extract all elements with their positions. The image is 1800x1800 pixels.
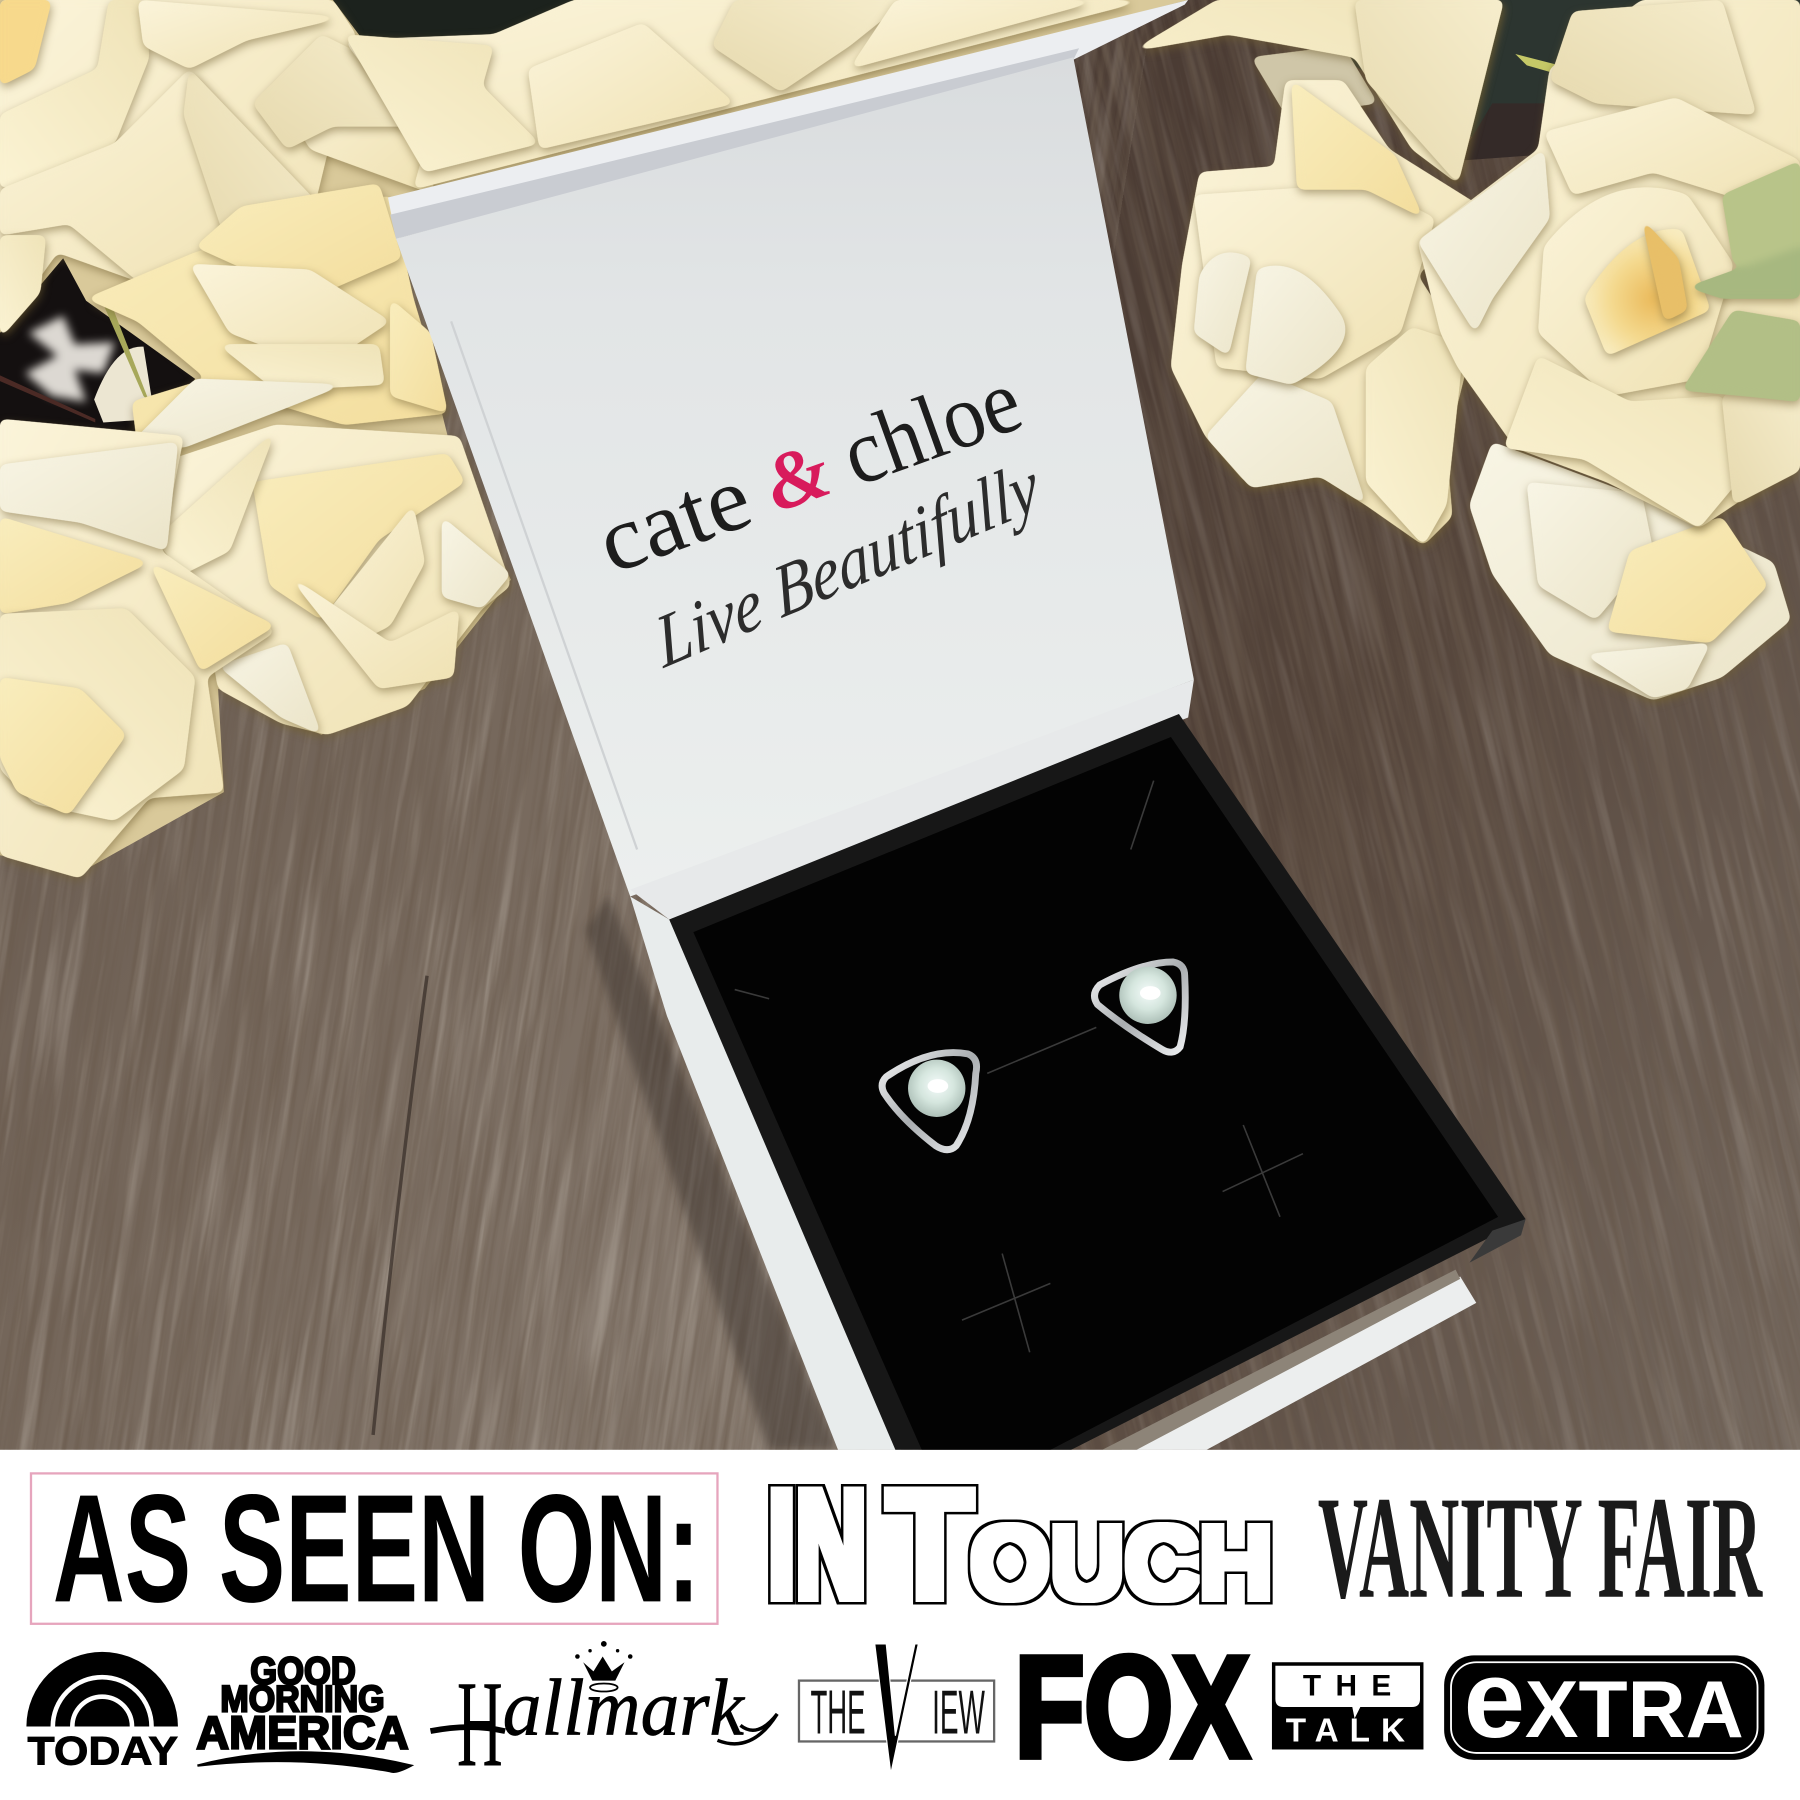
- logo strip background: [0, 1450, 1800, 1800]
- box shadow on table: [585, 895, 838, 1450]
- logo: InTouch: OUCH: [970, 1504, 1273, 1620]
- logo: The View: IEW: [932, 1678, 985, 1747]
- inner crease line: [451, 321, 637, 849]
- logo: The View: THE: [810, 1678, 866, 1747]
- flower underlayer shadow: [0, 0, 1188, 872]
- rose: upper middle left: [86, 34, 448, 448]
- logo: Extra: eXTRA: [1464, 1638, 1744, 1761]
- logo: InTouch: IN: [768, 1458, 867, 1632]
- rose: top right petal: [1131, 0, 1504, 184]
- logo: Today: [26, 1652, 178, 1773]
- logo: Good Morning America: AMERICA: [196, 1706, 409, 1758]
- logo: Good Morning America: GOOD: [250, 1650, 356, 1693]
- rose: lower middle left: [149, 425, 511, 735]
- rose: centre right: [1171, 80, 1481, 545]
- logo on lid: cate & chloe: [584, 348, 1034, 593]
- logo: The Talk: TALK: [1286, 1712, 1405, 1749]
- logo: Hallmark: H: [457, 1656, 503, 1793]
- logo on lid: cate & chloe: &: [753, 425, 841, 530]
- black tray: [669, 714, 1526, 1450]
- logo: The Talk: [1272, 1662, 1423, 1749]
- logo: InTouch: [768, 1458, 1273, 1632]
- lid top strip: [388, 0, 1188, 239]
- left white side of box: [630, 897, 901, 1450]
- dark foliage behind flowers: [333, 0, 1800, 161]
- flowers: left cluster: [0, 0, 511, 878]
- rose: bottom right: [1469, 442, 1791, 700]
- hinge strip: [630, 680, 1194, 920]
- callout: as seen on: AS SEEN ON:: [53, 1462, 700, 1634]
- rose: bottom left: [0, 419, 276, 878]
- velvet floor: [693, 737, 1498, 1450]
- white base under tray: [1122, 1277, 1476, 1450]
- flowers: right cluster: [1131, 0, 1800, 700]
- crown: [575, 1641, 633, 1692]
- rose: small rose behind: [1251, 46, 1378, 115]
- logo: InTouch: T: [886, 1458, 973, 1632]
- logo: Fox: FOX: [1015, 1627, 1249, 1787]
- logo: Today: TODAY: [28, 1728, 178, 1773]
- jewellery box: [388, 0, 1526, 1450]
- lid inner panel: [396, 57, 1194, 897]
- logo: Hallmark: [430, 1641, 777, 1793]
- logo: The View: [799, 1644, 994, 1774]
- callout: as seen on: [31, 1462, 717, 1634]
- tray marks: [735, 781, 1303, 1352]
- rose: large right: [1418, 0, 1800, 528]
- small white flower: [0, 304, 155, 422]
- rose: top left: [0, 0, 356, 339]
- tagline: Live Beautifully: Live Beautifully: [648, 444, 1046, 685]
- logo: Hallmark: allmark: [503, 1664, 745, 1753]
- logo: The Talk: THE: [1303, 1670, 1391, 1703]
- flowers: top centre: [344, 0, 1148, 189]
- logo: Good Morning America: MORNING: [220, 1679, 385, 1720]
- logo on lid: cate & chloe: chloe: [828, 348, 1034, 505]
- green leaves: [1682, 161, 1800, 402]
- earring: right: [1094, 962, 1185, 1052]
- earring: left: [882, 1053, 977, 1150]
- logo on lid: cate & chloe: cate: [584, 445, 763, 593]
- logo: Good Morning America: [196, 1650, 411, 1772]
